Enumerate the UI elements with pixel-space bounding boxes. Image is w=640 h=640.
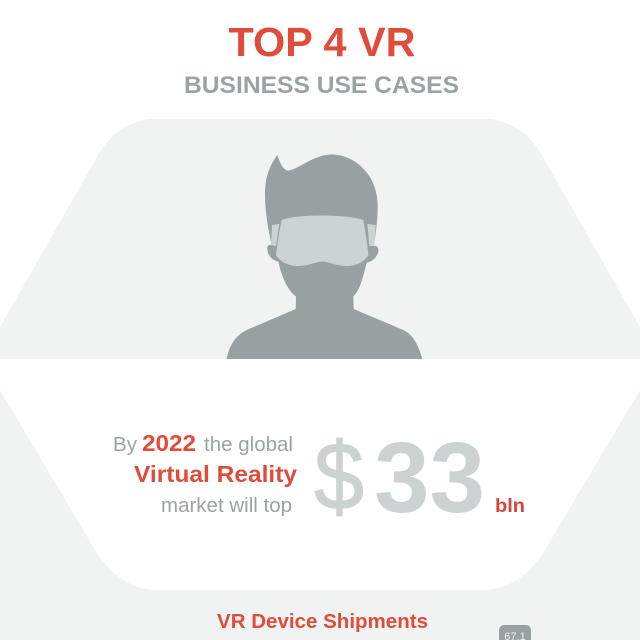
big number: $33 bln <box>314 422 525 534</box>
number 33: 33 <box>374 422 485 534</box>
line: By 2022 the global: the global <box>204 434 293 456</box>
panel: lower background with white hexagon cut-out <box>0 359 640 640</box>
line: By 2022 the global <box>113 430 293 456</box>
line: Virtual Reality: Virtual Reality <box>134 461 297 487</box>
silhouette <box>227 154 422 359</box>
text block: market statement <box>113 430 297 517</box>
icon: person wearing VR headset <box>227 154 422 359</box>
unit bln: bln <box>495 496 525 517</box>
subtitle: BUSINESS USE CASES <box>184 72 459 99</box>
title: TOP 4 VR <box>228 19 416 65</box>
headset straps <box>271 224 376 246</box>
line: By 2022 the global: By <box>113 434 137 456</box>
chart heading: VR Device Shipments: VR Device Shipments <box>217 611 428 633</box>
line: By 2022 the global: 2022 <box>142 430 196 456</box>
line: market will top: market will top <box>161 495 292 517</box>
panel: upper hexagon background <box>0 119 640 359</box>
chart value badge: 67.1 <box>499 625 531 640</box>
headset visor <box>276 215 368 266</box>
dollar sign: $ <box>314 423 364 530</box>
